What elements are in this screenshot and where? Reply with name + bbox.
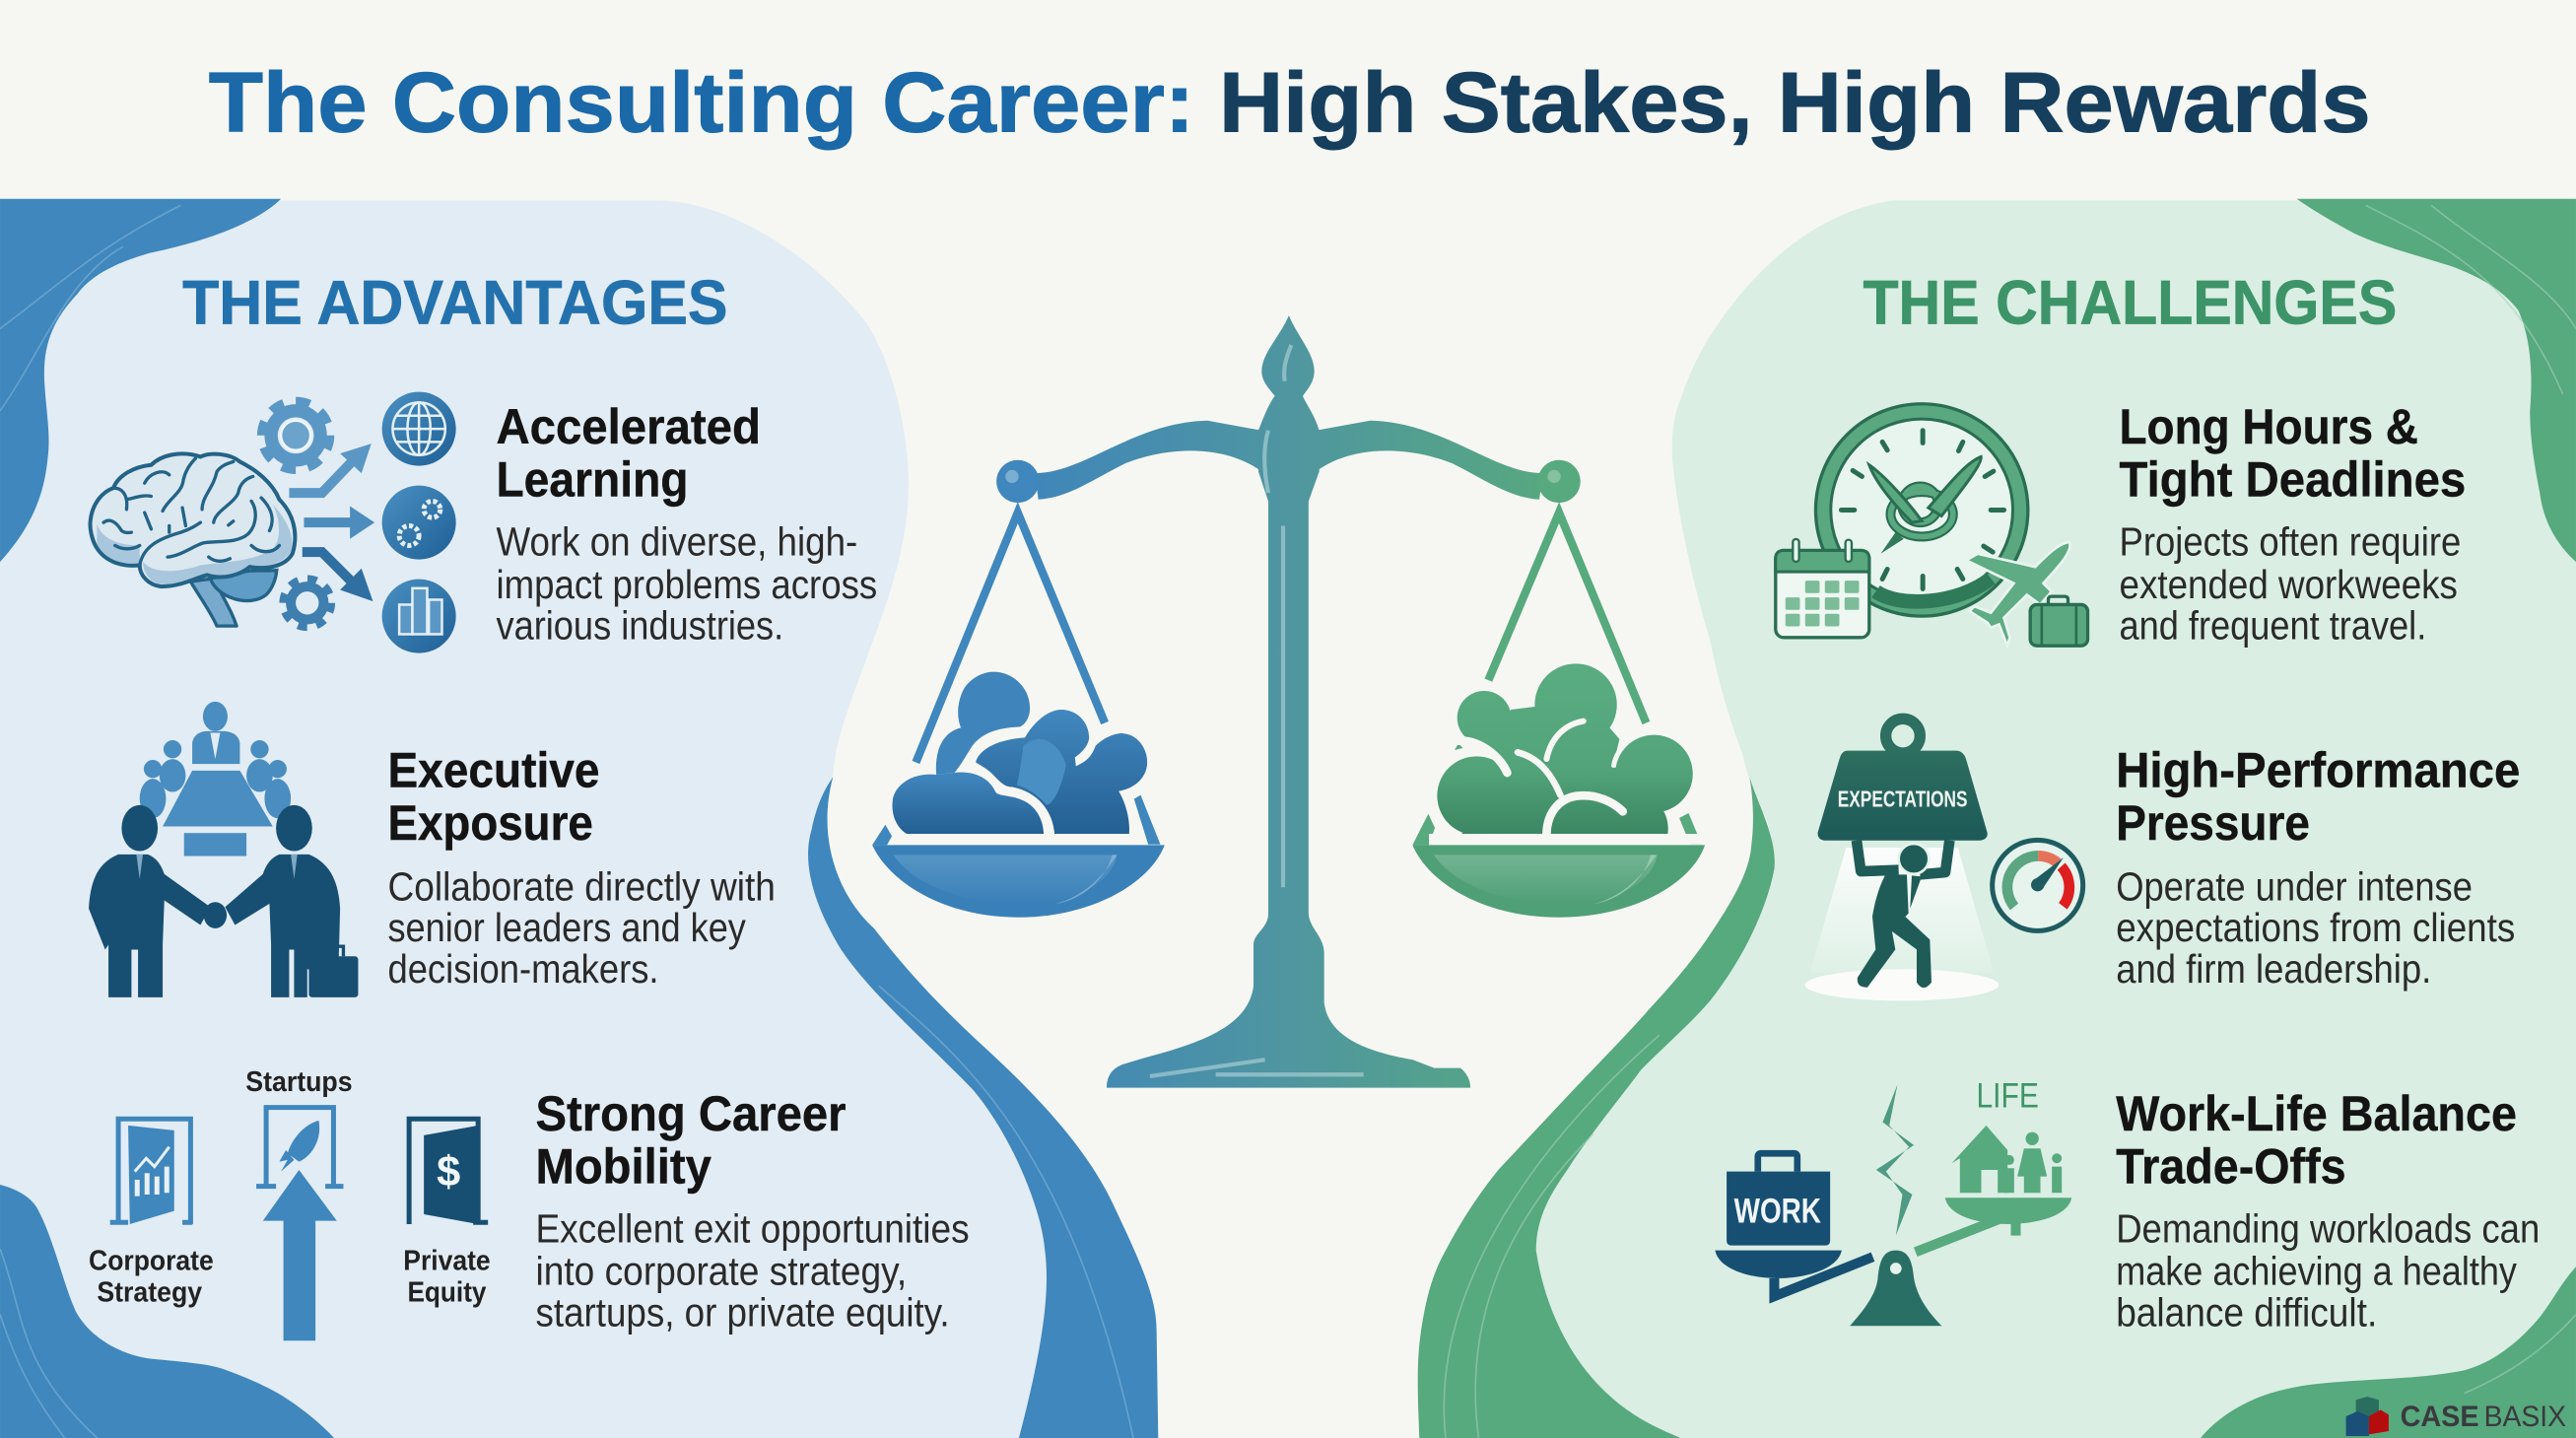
text: strong career mobility — [535, 1086, 970, 1335]
text: work-life balance: balance difficult. — [2116, 1289, 2377, 1335]
left pan — [872, 845, 1165, 918]
text: work-life balance: Trade-Offs — [2116, 1138, 2346, 1194]
heading: the advantages: THE ADVANTAGES — [182, 268, 728, 337]
left pan group — [872, 672, 1165, 918]
logo: casebasix: CASE — [2401, 1401, 2479, 1433]
ribbon: left — [808, 778, 1158, 1438]
text: strong career mobility: Excellent exit opportunities — [535, 1205, 970, 1251]
label: corporate strategy: Corporate — [89, 1246, 214, 1277]
icon: knot — [1890, 486, 1953, 536]
arrows — [289, 455, 358, 588]
title: The Consulting Career: — [209, 55, 1194, 150]
text: strong career mobility: Mobility — [535, 1138, 712, 1194]
icon: large gear — [264, 404, 327, 466]
icon: clock with knotted hands — [1776, 404, 2088, 646]
label: startups: Startups — [245, 1066, 353, 1098]
text: long hours: extended workweeks — [2120, 562, 2458, 607]
right pan group — [1412, 663, 1705, 918]
text: accelerated learning: various industries. — [496, 602, 783, 648]
text: executive exposure: Executive — [387, 743, 600, 798]
left pan contents — [892, 672, 1147, 834]
text: high performance: High-Performance — [2116, 743, 2520, 798]
icon: airplane — [1966, 542, 2070, 646]
icon: small gear — [284, 580, 330, 626]
item: high performance — [1805, 719, 2520, 1000]
text: executive exposure: decision-makers. — [387, 946, 659, 992]
icon: globe — [382, 392, 456, 466]
corner shape: top right — [2297, 199, 2576, 562]
item: accelerated learning — [91, 392, 877, 653]
text: high performance: and firm leadership. — [2116, 946, 2431, 992]
right pan contents — [1429, 663, 1702, 845]
panel: advantages — [0, 199, 1158, 1438]
text: long hours — [2120, 399, 2466, 648]
logo: casebasix — [2346, 1397, 2566, 1436]
text: work-life balance — [2116, 1086, 2540, 1335]
label: private equity: Private — [403, 1246, 491, 1277]
text: work-life balance: make achieving a healthy — [2116, 1249, 2517, 1294]
corner shape: top left — [0, 199, 281, 562]
icon: work life scale — [1715, 1077, 2071, 1326]
corner shape: bottom left — [0, 1185, 335, 1438]
label: private equity — [403, 1246, 491, 1308]
text: long hours: Projects often require — [2120, 518, 2461, 564]
item: work-life balance — [1715, 1077, 2540, 1335]
icon: boardroom and handshake — [89, 702, 358, 997]
icon: person lifting expectations weight — [1805, 719, 1999, 1000]
icon: door private equity: $ — [437, 1149, 460, 1197]
text: work-life balance: Demanding workloads can — [2116, 1205, 2540, 1251]
item: strong career mobility — [89, 1066, 970, 1340]
panel background: advantages — [0, 200, 1047, 1438]
panel background: challenges — [1536, 200, 2576, 1438]
icon: gears circle — [382, 486, 456, 560]
item: executive exposure — [89, 702, 776, 997]
text: accelerated learning: impact problems across — [496, 562, 877, 607]
icon: door corporate strategy — [110, 1119, 192, 1224]
label: life: LIFE — [1976, 1077, 2039, 1116]
icon: lightning crack — [1876, 1084, 1914, 1236]
icon: house and family — [1951, 1126, 2062, 1193]
icon: person lifting expectations weight: EXPECTATIONS — [1838, 786, 1967, 811]
icon: brain with arrows — [91, 392, 456, 653]
text: long hours: Long Hours & — [2120, 399, 2418, 454]
label: corporate strategy — [89, 1246, 214, 1308]
text: high performance: Operate under intense — [2116, 864, 2473, 910]
text: long hours: and frequent travel. — [2120, 602, 2426, 648]
balance scale — [872, 315, 1705, 1088]
text: accelerated learning: Learning — [496, 451, 689, 507]
text: accelerated learning: Accelerated — [496, 399, 761, 454]
text: executive exposure: Collaborate directly with — [387, 864, 776, 910]
title — [209, 55, 2371, 150]
right pan stubs — [1412, 743, 1702, 845]
icon: door startups with rocket — [256, 1108, 343, 1187]
beam — [1035, 421, 1261, 500]
hangers — [915, 513, 1646, 763]
logo: casebasix: BASIX — [2484, 1401, 2566, 1433]
text: strong career mobility: startups, or private equity. — [535, 1289, 950, 1335]
left pan stubs — [872, 795, 1160, 845]
icon: calendar — [1776, 542, 1869, 638]
text: high performance: expectations from clients — [2116, 905, 2515, 950]
item: long hours — [1776, 399, 2466, 648]
title: High Stakes, High Rewards — [1219, 55, 2371, 150]
arrow: up — [263, 1170, 337, 1340]
corner shape: bottom right — [2200, 1267, 2576, 1438]
icon: buildings circle — [382, 580, 456, 653]
text: high performance — [2116, 743, 2520, 992]
icon: gauge — [1993, 840, 2083, 930]
text: high performance: Pressure — [2116, 795, 2310, 851]
text: work-life balance: Work-Life Balance — [2116, 1086, 2517, 1141]
text: executive exposure: senior leaders and key — [387, 905, 746, 950]
text: executive exposure: Exposure — [387, 795, 593, 851]
text: accelerated learning: Work on diverse, high- — [496, 518, 857, 564]
label: private equity: Equity — [407, 1276, 487, 1308]
text: executive exposure — [387, 743, 776, 992]
icon: suitcase — [2030, 596, 2088, 646]
icon: work life scale: WORK — [1734, 1192, 1821, 1230]
text: strong career mobility: into corporate strategy, — [535, 1249, 907, 1294]
pillar and base — [1107, 315, 1470, 1088]
text: long hours: Tight Deadlines — [2120, 451, 2466, 507]
icon: door private equity — [409, 1119, 488, 1224]
heading: the challenges: THE CHALLENGES — [1863, 268, 2397, 337]
right pan — [1412, 845, 1705, 918]
label: corporate strategy: Strategy — [97, 1276, 202, 1308]
text: strong career mobility: Strong Career — [535, 1086, 847, 1141]
ribbon: right — [1418, 778, 1775, 1438]
panel: challenges — [1418, 199, 2576, 1438]
text: accelerated learning — [496, 399, 877, 648]
